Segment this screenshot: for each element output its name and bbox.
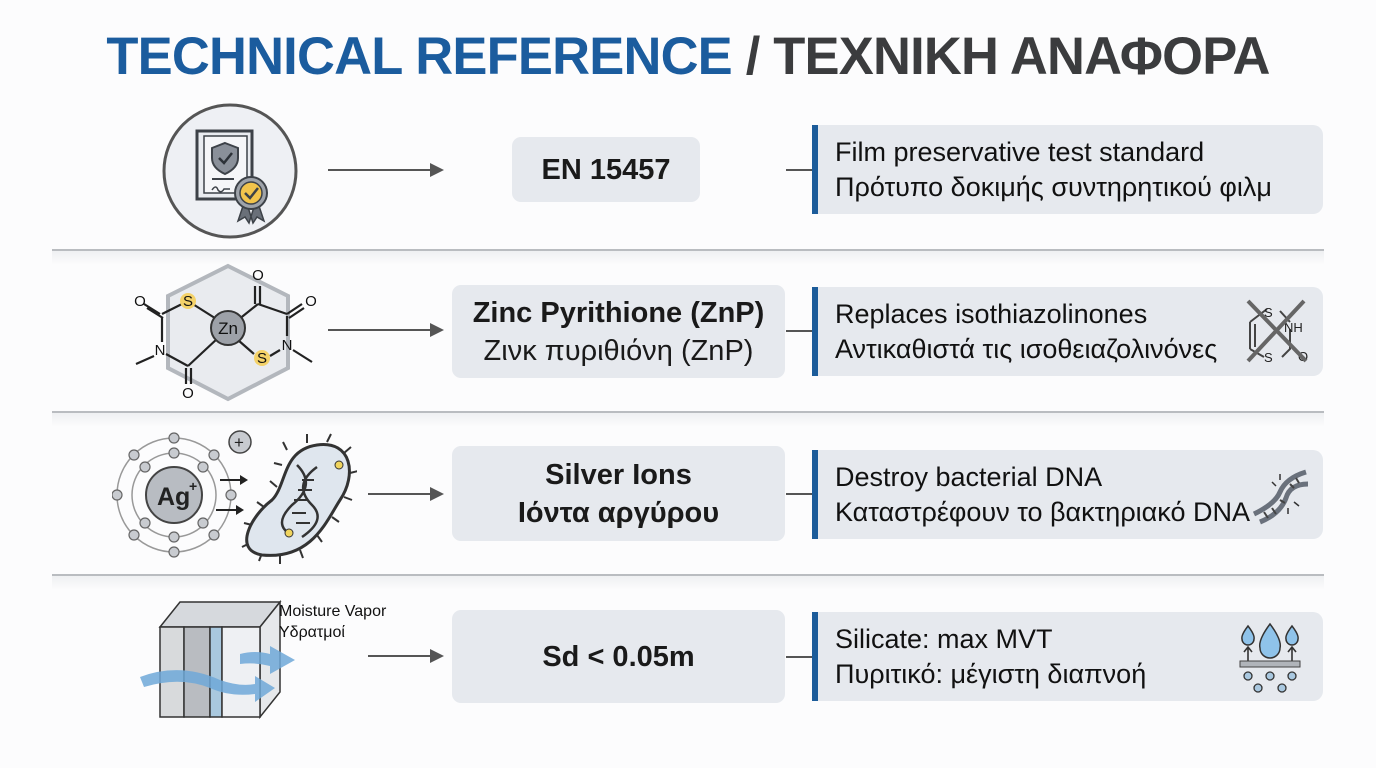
description 4	[812, 612, 1323, 701]
label: Silver Ions: Ιόντα αργύρου	[518, 496, 719, 528]
icon: wall with moisture vapor	[140, 600, 386, 719]
description 3	[812, 450, 1323, 539]
icon: zinc pyrithione structure: O	[182, 385, 194, 402]
description 1	[812, 125, 1323, 214]
icon: crossed isothiazolinone: S	[1264, 305, 1273, 320]
description 2	[812, 287, 1323, 376]
description 3: Καταστρέφουν το βακτηριακό DNA	[835, 496, 1250, 526]
label: Zinc Pyrithione: Ζινκ πυριθιόνη (ZnP)	[484, 334, 753, 366]
icon: broken DNA	[1253, 470, 1308, 524]
description 4: Πυριτικό: μέγιστη διαπνοή	[835, 658, 1146, 688]
label: Silver Ions	[452, 446, 785, 541]
label: moisture vapor: Moisture Vapor	[279, 603, 386, 620]
label: Silver Ions: Silver Ions	[545, 458, 692, 490]
description 4: Silicate: max MVT	[835, 624, 1053, 654]
label: Zinc Pyrithione: Zinc Pyrithione (ZnP)	[473, 296, 764, 328]
row 1: certificate icon	[162, 104, 298, 238]
icon: silver ion and bacterium	[112, 430, 357, 564]
icon: zinc pyrithione structure: S	[183, 293, 193, 310]
icon: crossed isothiazolinone: S	[1264, 350, 1273, 365]
arrow 1	[328, 163, 444, 177]
icon: zinc pyrithione structure: S	[257, 350, 267, 367]
label: moisture vapor	[279, 603, 386, 641]
title: TECHNICAL REFERENCE / ΤΕΧΝΙΚΗ ΑΝΑΦΟΡΑ	[106, 27, 1270, 86]
label: EN 15457: EN 15457	[542, 154, 670, 186]
icon: crossed isothiazolinone: NH	[1284, 320, 1303, 335]
icon: silver ion and bacterium: +	[234, 433, 244, 452]
label: Zinc Pyrithione	[452, 285, 785, 378]
icon: zinc pyrithione structure: O	[252, 267, 264, 284]
description 3: Destroy bacterial DNA	[835, 462, 1102, 492]
arrow 2	[328, 323, 444, 337]
arrow 3	[368, 487, 444, 501]
icon: zinc pyrithione structure: O	[305, 293, 317, 310]
description 2: Replaces isothiazolinones	[835, 298, 1147, 328]
label: EN 15457	[512, 137, 700, 202]
label: Sd: Sd < 0.05m	[542, 640, 695, 672]
description 1: Πρότυπο δοκιμής συντηρητικού φιλμ	[835, 172, 1272, 202]
icon: zinc pyrithione structure	[134, 264, 317, 402]
icon: zinc pyrithione structure: N	[155, 342, 165, 359]
icon: crossed isothiazolinone	[1246, 300, 1308, 365]
description 2: Αντικαθιστά τις ισοθειαζολινόνες	[835, 334, 1217, 364]
icon: silver ion and bacterium: Ag	[157, 483, 190, 511]
icon: zinc pyrithione structure: O	[134, 293, 146, 310]
label: Sd	[452, 610, 785, 703]
icon: zinc pyrithione structure: Zn	[218, 319, 238, 338]
label: moisture vapor: Υδρατμοί	[279, 624, 345, 641]
description 1: Film preservative test standard	[835, 136, 1204, 166]
icon: breathable surface	[1240, 622, 1300, 693]
icon: zinc pyrithione structure: N	[282, 337, 292, 354]
icon: silver ion and bacterium: +	[189, 478, 197, 494]
arrow 4	[368, 649, 444, 663]
icon: crossed isothiazolinone: O	[1298, 349, 1308, 364]
